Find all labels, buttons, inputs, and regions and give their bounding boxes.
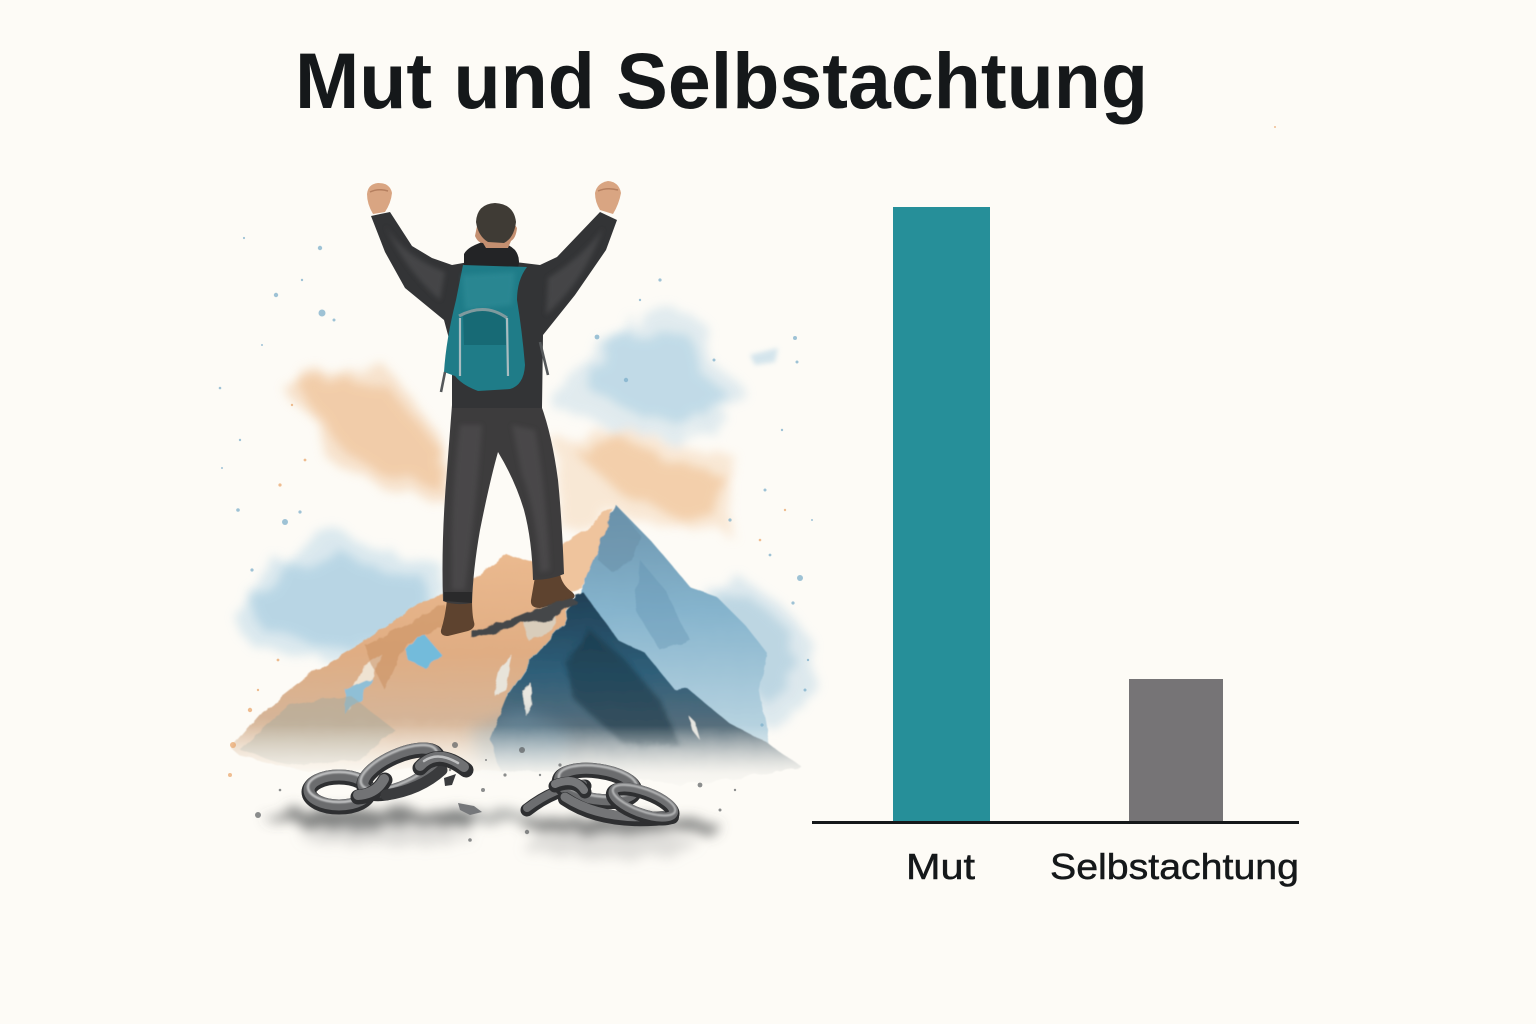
title: Mut und Selbstachtung xyxy=(295,36,1148,125)
label: Selbstachtung: Selbstachtung xyxy=(1050,846,1299,887)
label: Mut: Mut xyxy=(906,846,975,887)
paint splatter xyxy=(219,237,813,727)
backpack xyxy=(441,265,548,392)
mountain: back blue peak xyxy=(540,505,770,760)
boots xyxy=(441,574,575,636)
ground fade beneath the mountain xyxy=(220,725,820,800)
bar chart xyxy=(812,207,1299,887)
watercolor clouds xyxy=(232,303,812,732)
figure: person with raised arms xyxy=(367,181,621,638)
legs xyxy=(442,405,564,604)
illustration: person on a mountain with broken chains xyxy=(219,126,1276,858)
boot shadow xyxy=(472,598,578,638)
mountain: orange left slope xyxy=(231,555,572,770)
ground shadow under chains xyxy=(265,809,720,858)
blue wash where mountain meets ground xyxy=(470,710,570,770)
fists xyxy=(367,183,392,214)
axis line xyxy=(812,821,1299,824)
hood xyxy=(464,241,519,268)
icon: broken chain left xyxy=(308,736,466,807)
icon: broken chain right xyxy=(458,761,679,826)
bar: Mut xyxy=(893,207,990,822)
bar: Selbstachtung xyxy=(1129,679,1223,822)
arms and torso xyxy=(371,212,617,408)
head xyxy=(475,220,517,248)
mountain: dark right slope xyxy=(490,592,802,785)
